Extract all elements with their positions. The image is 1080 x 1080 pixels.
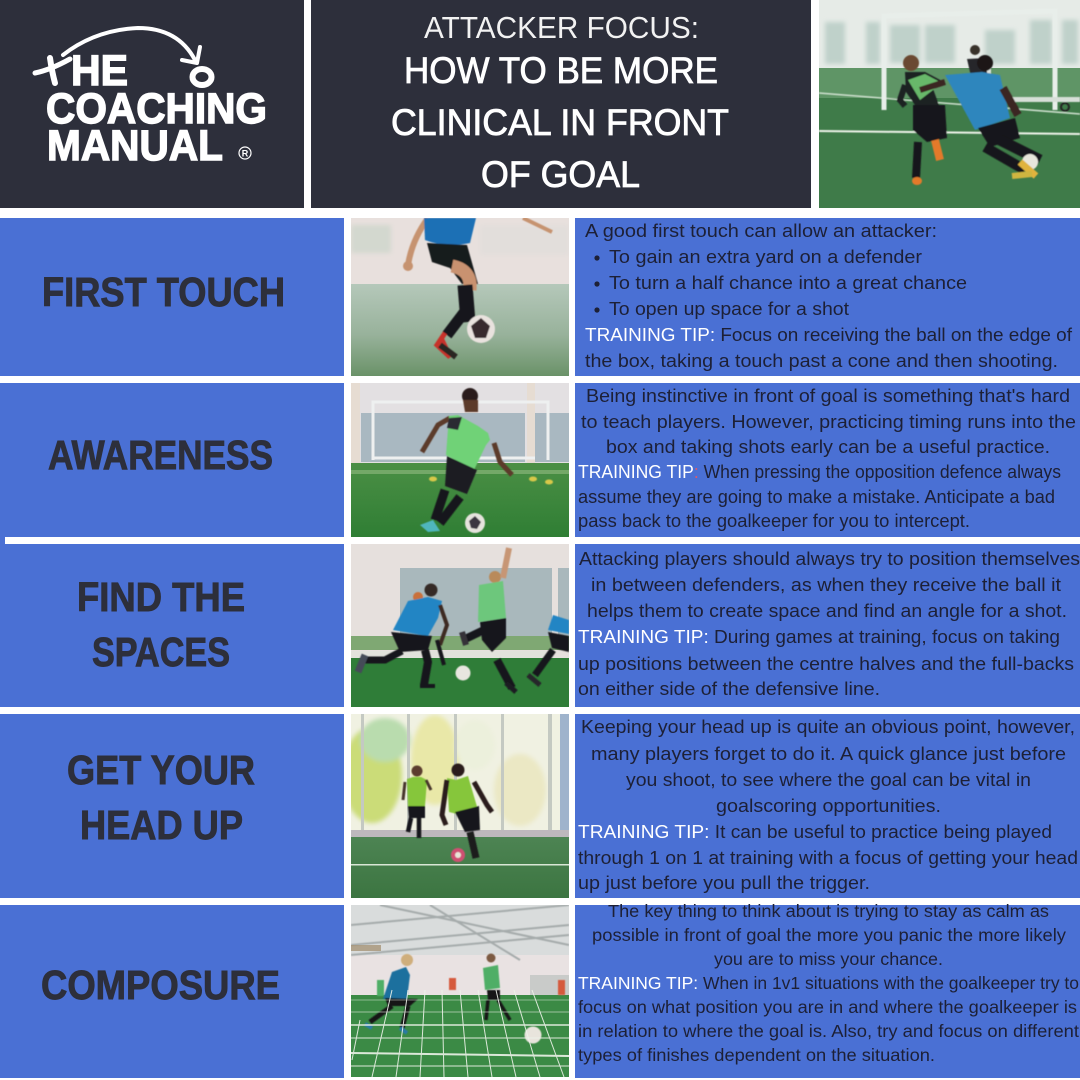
description: Being instinctive in front of goal is something that's hard [586,386,1070,406]
description: you are to miss your chance. [714,949,943,969]
kicker: ATTACKER FOCUS: [424,10,699,45]
description: through 1 on 1 at training with a focus of getting your head [578,848,1078,868]
description: to teach players. However, practicing timing runs into the [581,412,1076,432]
label panel: FIND THE [77,574,245,620]
label panel [0,544,344,707]
main title: HOW TO BE MORE [404,50,718,91]
photo: players in space [351,544,569,707]
label panel: SPACES [92,629,230,675]
row 3: find the spaces [0,544,1080,707]
description: possible in front of goal the more you panic the more likely [592,925,1066,945]
description: TRAINING TIP: When in 1v1 situations with the goalkeeper try to [578,973,1079,993]
description: in relation to where the goal is. Also, try and focus on different [578,1021,1079,1041]
description: To turn a half chance into a great chance [609,273,967,293]
photo: player head up [351,714,569,898]
description: the box, taking a touch past a cone and then shooting. [585,351,1058,371]
label panel: HEAD UP [80,802,243,848]
description: The key thing to think about is trying to stay as calm as [608,901,1049,921]
main title: OF GOAL [481,154,640,195]
panel: logo [0,0,304,208]
label panel [0,905,344,1078]
description: pass back to the goalkeeper for you to intercept. [578,511,970,531]
logo wordmark: MANUAL [47,122,223,170]
description [575,218,1080,376]
description: in between defenders, as when they receive the ball it [591,575,1061,595]
label panel [0,714,344,898]
description: TRAINING TIP: During games at training, focus on taking [578,627,1060,647]
description: on either side of the defensive line. [578,679,880,699]
registered mark [239,147,251,159]
description: types of finishes dependent on the situation. [578,1045,935,1065]
main title: CLINICAL IN FRONT [391,102,729,143]
description: To gain an extra yard on a defender [609,247,922,267]
row 4: get your head up [0,714,1080,898]
photo: players behind the goal net [351,905,569,1077]
description: Attacking players should always try to position themselves [579,549,1080,569]
photo: player first touch [351,218,569,376]
registered mark: R [242,148,249,158]
photo: header attackers [819,0,1080,208]
logo wordmark: COACHING [46,85,267,133]
row 5: composure [0,901,1080,1078]
label panel: AWARENESS [48,432,273,478]
row 1: first touch [0,218,1080,376]
label panel [0,218,344,376]
description [575,714,1080,898]
description: many players forget to do it. A quick glance just before [591,744,1066,764]
description: A good first touch can allow an attacker: [585,221,937,241]
description: helps them to create space and find an angle for a shot. [587,601,1067,621]
description: focus on what position you are in and where the goalkeeper is [578,997,1077,1017]
icon: tactic cross, arrow and circle [35,28,212,85]
description: box and taking shots early can be a useful practice. [606,437,1050,457]
row 2: awareness [0,383,1080,544]
panel: title [311,0,811,208]
description: up positions between the centre halves and the full-backs [578,654,1074,674]
label panel: COMPOSURE [41,962,280,1008]
label panel [0,383,344,544]
description: TRAINING TIP: It can be useful to practice being played [578,822,1052,842]
label panel: FIRST TOUCH [42,269,285,315]
description [575,544,1080,707]
description: TRAINING TIP: Focus on receiving the ball on the edge of [585,325,1073,345]
description: you shoot, to see where the goal can be vital in [626,770,1031,790]
description: Keeping your head up is quite an obvious point, however, [581,717,1075,737]
description [575,901,1080,1078]
description: assume they are going to make a mistake. Anticipate a bad [578,487,1055,507]
logo wordmark [46,47,267,170]
description [575,383,1080,537]
label panel: GET YOUR [67,747,255,793]
description: goalscoring opportunities. [716,796,941,816]
main title [391,50,729,195]
description: To open up space for a shot [609,299,849,319]
photo: player dribbling [351,383,569,537]
description: TRAINING TIP: When pressing the opposition defence always [578,462,1061,482]
logo wordmark: HE [71,47,128,95]
description: up just before you pull the trigger. [578,873,870,893]
